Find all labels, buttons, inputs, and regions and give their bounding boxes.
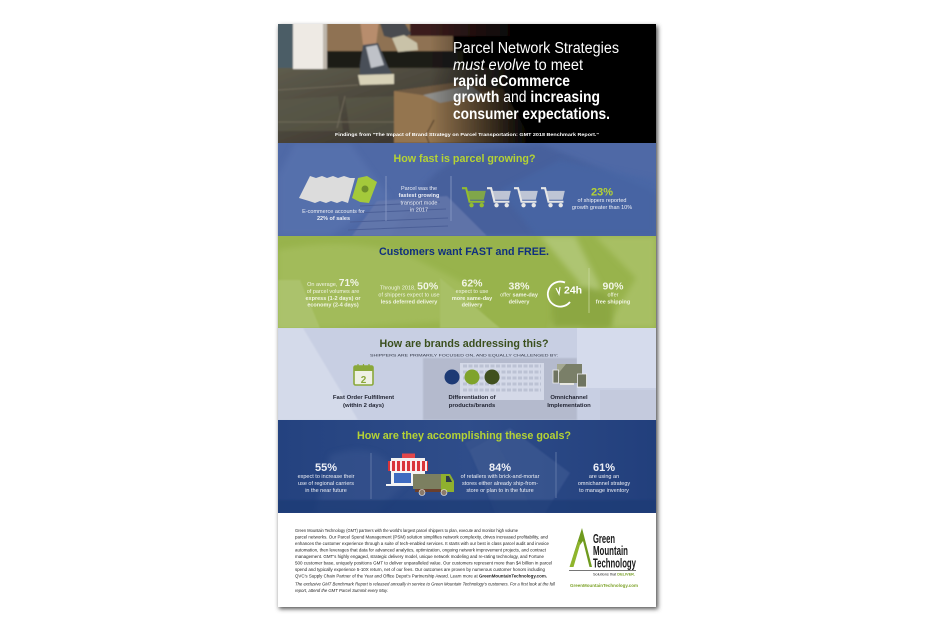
panel: how are brands addressing this — [278, 328, 656, 420]
stat: 61 percent: are using an — [589, 474, 619, 480]
stat: 90 percent: free shipping — [596, 300, 630, 306]
label: omnichannel — [547, 395, 591, 409]
stat: 71 percent: of parcel volumes are — [307, 289, 359, 295]
stat: 50 percent — [378, 282, 440, 304]
stat: 23 percent: growth greater than 10% — [572, 205, 632, 211]
stat: 38 percent: offer same-day — [500, 292, 539, 298]
headline: must evolve to meet — [453, 57, 584, 74]
icon: 24h clock — [548, 282, 582, 307]
company description — [295, 528, 552, 578]
label: fast order fulfillment — [333, 395, 394, 409]
stat: 62 percent: more same-day — [452, 296, 493, 302]
report note — [295, 582, 556, 593]
icon: calendar: 2 — [361, 375, 367, 386]
stat: 84 percent — [461, 462, 540, 494]
stat: 55 percent — [298, 464, 354, 492]
headline: consumer expectations. — [453, 106, 610, 123]
stat: 84 percent: of retailers with brick-and-mortar — [461, 474, 540, 480]
icon: calendar — [354, 364, 373, 386]
stat: 55 percent: use of regional carriers — [298, 481, 354, 487]
stat: 62 percent: 62% — [461, 278, 483, 290]
stat: 61 percent: to manage inventory — [579, 488, 629, 494]
stat: 23 percent — [572, 188, 632, 210]
text: fastest growing mode: transport mode — [400, 200, 438, 206]
poster base — [278, 24, 656, 607]
stat: 71 percent: express (1-2 days) or — [305, 296, 361, 302]
report note: report, attend the GMT Parcel Summit every May. — [295, 588, 388, 593]
heading: Customers want FAST and FREE. — [379, 246, 549, 258]
heading: How are they accomplishing these goals? — [357, 430, 571, 442]
subheading: SHIPPERS ARE PRIMARILY FOCUSED ON, AND EQUALLY CHALLENGED BY: — [370, 354, 558, 358]
panel: how fast is parcel growing — [278, 143, 656, 236]
label: omnichannel: Omnichannel — [550, 395, 588, 401]
company description: 500 customer base, uniquely positions GMT to deliver unparalleled value. Our customers represent more than $4 billion in parcel — [295, 560, 552, 566]
stat: 23 percent: 23% — [591, 186, 613, 198]
logo: Green Mountain Technology: Green — [593, 531, 615, 546]
green photo background — [278, 236, 656, 328]
panel: customers want fast and free — [278, 236, 656, 328]
stat: 71 percent — [305, 278, 361, 308]
stat: 61 percent — [578, 462, 630, 494]
stat: 90 percent — [596, 282, 630, 304]
text: e-commerce share: E-commerce accounts for — [302, 209, 365, 215]
stat: 84 percent: store or plan to in the future — [466, 488, 534, 494]
text: e-commerce share — [302, 209, 365, 220]
stat: 55 percent: 55% — [315, 462, 337, 474]
icon: omnichannel devices — [553, 364, 586, 387]
text: fastest growing mode: in 2017 — [410, 208, 428, 214]
label: fast order fulfillment: Fast Order Fulfillment — [333, 395, 394, 401]
stat: 71 percent: economy (2-4 days) — [307, 302, 359, 308]
stat: 23 percent: of shippers reported — [578, 198, 626, 204]
stat: 55 percent: in the near future — [305, 488, 347, 494]
logo: Green Mountain Technology: Technology — [593, 556, 636, 570]
stat: 62 percent: expect to use — [456, 289, 488, 295]
company description: parcel networks. Our Parcel Spend Management (PSM) solution simplifies network complexity, drives increased profitability, and — [295, 534, 548, 540]
headline — [453, 40, 619, 123]
headline: Parcel Network Strategies — [453, 40, 619, 57]
website link: GreenMountainTechnology.com — [570, 583, 638, 588]
stat: 62 percent: delivery — [462, 302, 483, 308]
panel: how are they accomplishing these goals — [278, 420, 656, 513]
stat: 90 percent: 90% — [602, 280, 624, 292]
hero photo: doorstep with sneaker and parcel — [278, 24, 656, 143]
poster shadow — [279, 26, 658, 609]
stat: 71 percent: On average, 71% — [307, 278, 359, 289]
stat: 84 percent: 84% — [489, 462, 511, 474]
stat: 50 percent: of shippers expect to use — [378, 292, 440, 298]
company description: spend and typically experience 5-10X return, net of our fees. Our outcomes are proven by numerous customer honors including — [295, 567, 545, 572]
source line: Findings from "The Impact of Brand Strategy on Parcel Transportation: GMT 2018 Benchmark Report." — [335, 132, 599, 137]
stat: 50 percent: less deferred delivery — [381, 300, 438, 306]
stat: 61 percent: omnichannel strategy — [578, 481, 630, 487]
blue photo background — [278, 143, 656, 236]
company description: Green Mountain Technology (GMT) partners with the world's largest parcel shippers to plan, execute and monitor high volume — [295, 528, 518, 533]
icon: dollar bills — [299, 176, 377, 203]
panel: hero photo header — [278, 24, 656, 143]
stat: 61 percent: 61% — [593, 462, 615, 474]
label: fast order fulfillment: (within 2 days) — [343, 403, 384, 409]
company description: enhances the customer experience through a suite of tech-enabled services. It starts with our best in class parcel audit and invoice — [295, 541, 549, 546]
logo: Green Mountain Technology: Solutions that DELIVER. — [593, 572, 635, 576]
icon: three circles — [444, 370, 500, 384]
label: omnichannel: Implementation — [547, 403, 591, 409]
text: fastest growing mode — [399, 186, 439, 214]
label: differentiation — [448, 395, 496, 409]
stat: 62 percent — [452, 280, 492, 308]
company description: automation, then leverages that data for advanced analytics, optimization, ongoing network improvement projects, and contract — [295, 548, 547, 552]
company description: QVC's Supply Chain Partner of the Year and Office Depot's Partnership Award. Learn more at GreenMountainTechnology.com. — [295, 574, 547, 578]
stat: 84 percent: stores either already ship-from- — [462, 481, 538, 487]
headline: rapid eCommerce — [453, 73, 570, 90]
headline: growth and increasing — [453, 89, 600, 106]
text: e-commerce share: 22% of sales — [317, 216, 350, 222]
stat: 38 percent: 38% — [508, 280, 530, 292]
stat: 38 percent: delivery — [509, 300, 530, 306]
icon: 24h clock: 24h — [564, 284, 582, 296]
logo: Green Mountain Technology — [569, 528, 636, 576]
panel: company footer — [295, 528, 638, 593]
icon: row of shopping carts — [462, 188, 565, 207]
stat: 90 percent: offer — [608, 292, 619, 298]
report note: The exclusive GMT Benchmark Report is released annually in service to Green Mountain Technology's customers. For a first look at the full — [295, 582, 556, 586]
navy photo background — [278, 420, 656, 513]
heading: How are brands addressing this? — [380, 338, 548, 350]
logo: Green Mountain Technology: Mountain — [593, 543, 628, 558]
pale desk photo background — [278, 328, 656, 420]
icon: storefront and truck — [386, 454, 454, 496]
heading: How fast is parcel growing? — [394, 153, 536, 165]
text: fastest growing mode: fastest growing — [399, 193, 439, 199]
stat: 38 percent — [500, 282, 538, 304]
company description: management. GMT's highly engaged, strategic delivery model, unique network modeling and re-rating technology, and Fortune — [295, 554, 544, 559]
stat: 55 percent: expect to increase their — [298, 474, 355, 480]
label: differentiation: Differentiation of — [448, 395, 496, 401]
text: fastest growing mode: Parcel was the — [401, 186, 437, 192]
label: differentiation: products/brands — [449, 403, 496, 409]
stat: 50 percent: Through 2018, 50% — [380, 280, 439, 292]
